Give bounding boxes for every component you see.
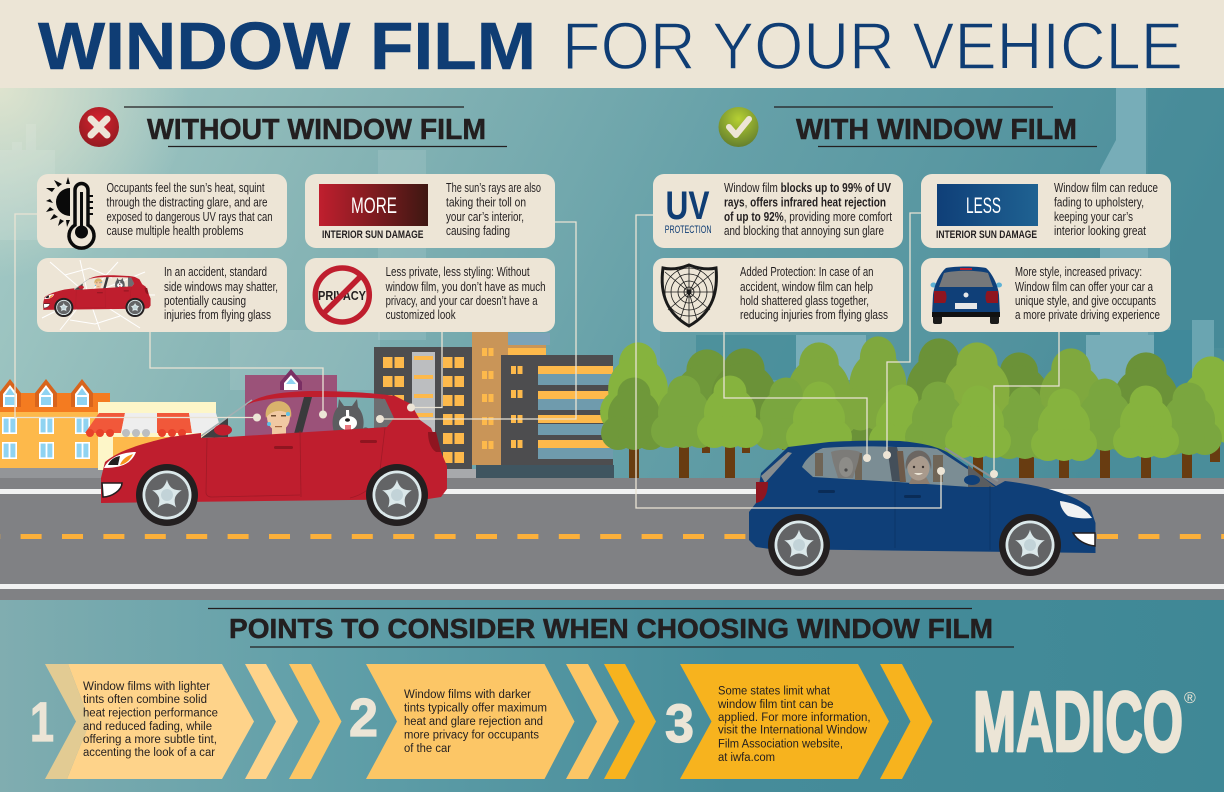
- title: FOR YOUR VEHICLE: [562, 9, 1183, 84]
- text block: [446, 180, 541, 238]
- rear wheel: [768, 514, 830, 576]
- icon: no privacy: [315, 268, 369, 322]
- text block: The sun’s rays are also: [446, 180, 541, 195]
- fog lamp: [102, 483, 122, 497]
- purple building: [245, 369, 337, 450]
- text block: a more private driving experience: [1015, 307, 1160, 322]
- tail light: [428, 432, 441, 452]
- panel: shattered windows: [37, 258, 287, 332]
- text block: of up to 92%, providing more comfort: [724, 209, 892, 224]
- blue car body: [749, 441, 1096, 553]
- front wheel: [136, 464, 198, 526]
- icon: green check: [718, 107, 758, 147]
- text block: cause multiple health problems: [106, 223, 244, 238]
- more gauge: [319, 184, 428, 241]
- point 2: [349, 664, 574, 779]
- text block: taking their toll on: [446, 194, 526, 210]
- text block: [717, 686, 871, 764]
- less gauge: INTERIOR SUN DAMAGE: [936, 229, 1037, 241]
- text block: [404, 689, 547, 755]
- road: [0, 478, 1224, 600]
- icon: small red car with shatter: [42, 260, 155, 330]
- icon: cracked shield: [662, 265, 716, 326]
- title band: [0, 0, 1224, 88]
- more gauge: MORE: [351, 193, 397, 218]
- less gauge: [936, 184, 1038, 241]
- blue car with film: [749, 441, 1096, 576]
- icon: blue car rear view: [930, 266, 1002, 324]
- text block: of the car: [404, 743, 451, 755]
- driver: [266, 401, 291, 440]
- text block: applied. For more information,: [718, 712, 871, 724]
- tree trunks: [629, 420, 1220, 480]
- text block: heat rejection performance: [83, 708, 218, 720]
- text block: More style, increased privacy:: [1015, 264, 1142, 279]
- chevron 1 tan edge: [45, 664, 90, 779]
- title: [38, 9, 1183, 84]
- seat post: [897, 451, 906, 482]
- text block: Less private, less styling: Without: [386, 264, 530, 279]
- text block: Some states limit what: [718, 686, 831, 698]
- chevron 3: [680, 664, 889, 779]
- chevron 1: [67, 664, 254, 779]
- mirror: [964, 475, 980, 485]
- point 3: [665, 664, 889, 779]
- text block: [724, 180, 892, 238]
- text block: injuries from flying glass: [164, 307, 271, 322]
- text block: interior looking great: [1054, 223, 1146, 238]
- text block: tints typically offer maximum: [404, 702, 547, 714]
- text block: Window film can offer your car a: [1015, 279, 1154, 294]
- text block: at iwfa.com: [718, 752, 775, 764]
- icon: uv protection: UV: [666, 184, 710, 228]
- window frame corner: [968, 465, 995, 487]
- icon: sun and thermometer: [46, 177, 94, 248]
- chevron 2: [366, 664, 574, 779]
- heading: points to consider: POINTS TO CONSIDER WHEN CHOOSING WINDOW FILM: [229, 613, 993, 644]
- panel: uv protection: [653, 174, 903, 248]
- front row of trees: [601, 376, 1222, 461]
- text block: tints often combine solid: [83, 694, 207, 706]
- panel: heat and glare: [37, 174, 287, 248]
- windshield edge: [201, 400, 252, 436]
- text block: Occupants feel the sun’s heat, squint: [106, 180, 265, 195]
- less gauge: LESS: [966, 193, 1001, 218]
- text block: exposed to dangerous UV rays that can: [106, 209, 272, 224]
- text block: privacy, and your car doesn’t have a: [386, 293, 538, 308]
- text block: accident, window film can help: [740, 279, 873, 294]
- logo: madico: ®: [1184, 690, 1196, 707]
- car body: [101, 391, 447, 503]
- sky background: [0, 88, 1224, 600]
- icon: red x: [79, 107, 119, 147]
- title: WINDOW FILM: [38, 9, 536, 84]
- text block: Window films with lighter: [83, 681, 210, 693]
- back row of trees: [600, 336, 1224, 452]
- text block: and reduced fading, while: [83, 721, 212, 733]
- text block: causing fading: [446, 223, 510, 238]
- panel: added protection: [653, 258, 903, 332]
- door handles: [274, 440, 377, 449]
- text block: [385, 264, 546, 322]
- text block: Film Association website,: [718, 738, 843, 750]
- sky glow: [0, 88, 200, 278]
- text block: [106, 180, 272, 238]
- text block: Added Protection: In case of an: [740, 264, 874, 279]
- red car without film: [101, 391, 447, 526]
- front wheel: [999, 514, 1061, 576]
- tinted side window: [802, 446, 995, 487]
- panel: less privacy: [305, 258, 555, 332]
- rear wheel: [366, 464, 428, 526]
- rear window sliver: [761, 452, 792, 483]
- point 1: [30, 664, 254, 779]
- rear quarter and pillar: [201, 397, 394, 438]
- text block: In an accident, standard: [164, 264, 267, 279]
- orange townhouse building: [0, 379, 110, 478]
- text block: [164, 264, 278, 322]
- number 1: 1: [30, 690, 54, 753]
- callout lines: without film: [15, 214, 576, 423]
- more gauge: INTERIOR SUN DAMAGE: [322, 229, 424, 241]
- tan tower: [472, 332, 550, 465]
- text block: visit the International Window: [718, 724, 868, 736]
- text block: heat and glare rejection and: [404, 716, 543, 728]
- text block: hold shattered glass together,: [740, 293, 869, 308]
- text block: [740, 264, 888, 322]
- text block: rays, offers infrared heat rejection: [724, 194, 886, 210]
- b pillar: [887, 447, 905, 482]
- callout lines: with film: [636, 213, 1059, 508]
- text block: Window films with darker: [404, 689, 531, 701]
- headlight: [104, 452, 136, 468]
- text block: offering a more subtle tint,: [83, 734, 217, 746]
- door handles: [818, 490, 921, 498]
- panel: more sun damage: [305, 174, 555, 248]
- number 3: 3: [665, 694, 694, 754]
- text block: your car’s interior,: [446, 209, 524, 224]
- arrows after point 1: [245, 664, 342, 779]
- car detail lines: [206, 428, 385, 498]
- windshield outer edge: [945, 448, 998, 481]
- panel: less sun damage: [921, 174, 1171, 248]
- woman in blue car: [906, 450, 931, 484]
- text block: reducing injuries from flying glass: [740, 307, 888, 322]
- text block: side windows may shatter,: [164, 279, 278, 294]
- rear seats: [815, 453, 943, 482]
- fog lamp: [1073, 533, 1095, 546]
- dog: [333, 399, 370, 432]
- text block: unique style, and give occupants: [1015, 293, 1156, 308]
- text block: Window film can reduce: [1054, 180, 1158, 195]
- tail light: [756, 482, 768, 503]
- icon: no privacy: PRIVACY: [318, 288, 366, 303]
- text block: through the distracting glare, and are: [106, 194, 268, 210]
- text block: potentially causing: [164, 293, 246, 308]
- shop with awning: [85, 402, 222, 470]
- text block: more privacy for occupants: [404, 730, 539, 742]
- text block: keeping your car’s: [1054, 209, 1133, 224]
- text block: accenting the look of a car: [83, 747, 215, 759]
- bottom band background: [0, 600, 1224, 792]
- heading: without window film: WITHOUT WINDOW FILM: [147, 114, 486, 146]
- arrow after point 3: [880, 664, 932, 779]
- icon: uv protection: PROTECTION: [665, 224, 712, 236]
- dark apartment building: [374, 347, 472, 469]
- text block: Window film blocks up to 99% of UV: [724, 180, 891, 195]
- door lines: [895, 482, 990, 550]
- text block: [83, 681, 218, 759]
- number 2: 2: [349, 688, 378, 748]
- dog in blue car: [831, 450, 860, 478]
- panel: more style: [921, 258, 1171, 332]
- text block: [1054, 180, 1158, 238]
- text block: fading to upholstery,: [1054, 194, 1144, 210]
- text block: window film tint can be: [717, 699, 834, 711]
- skyline silhouettes: [0, 88, 1224, 400]
- text block: [1015, 264, 1160, 322]
- text block: and blocking that annoying sun glare: [724, 223, 884, 238]
- arrows after point 2: [566, 664, 656, 779]
- mirror: [214, 424, 232, 436]
- headlight: [1060, 501, 1092, 518]
- heading: with window film: WITH WINDOW FILM: [796, 114, 1077, 146]
- striped building: [447, 355, 614, 478]
- text block: customized look: [386, 307, 456, 322]
- text block: window film, you don’t have as much: [385, 279, 546, 294]
